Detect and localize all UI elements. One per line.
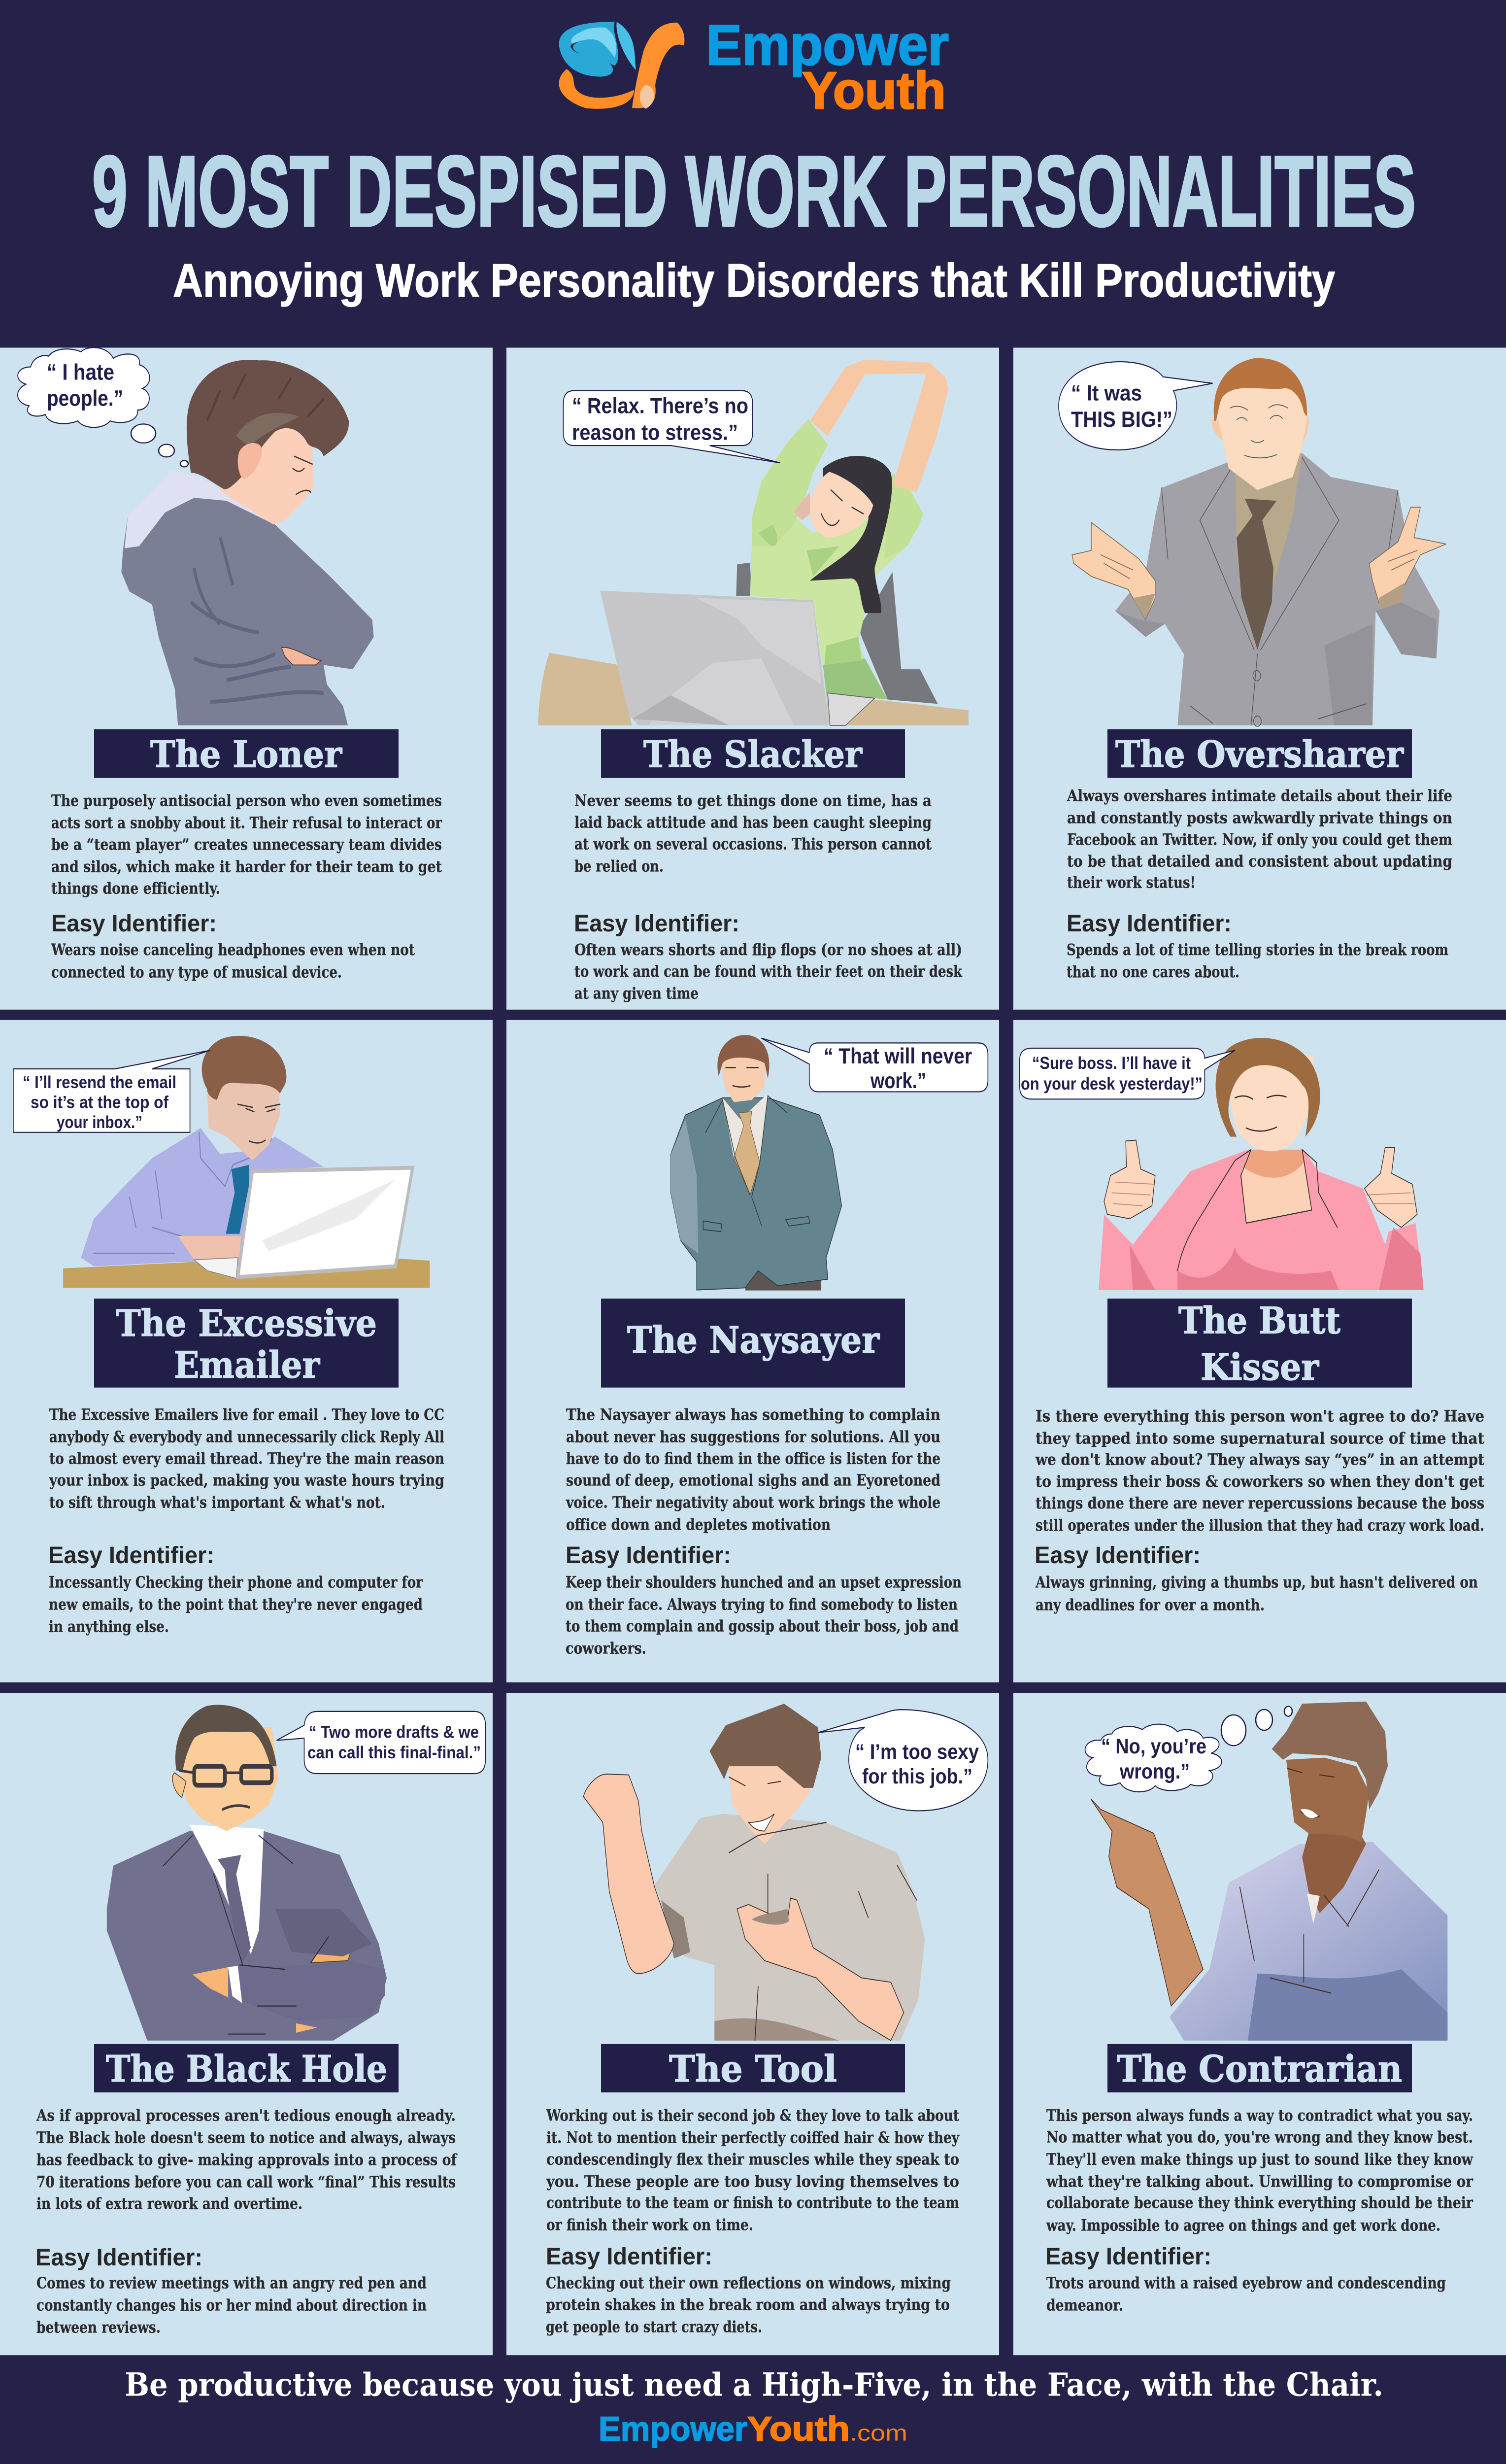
quote text: for this job.”: [862, 1764, 972, 1788]
speech bubble: [1059, 362, 1213, 450]
quote text: your inbox.”: [57, 1112, 142, 1131]
easy identifier heading: Easy Identifier:: [566, 1541, 731, 1569]
description: Working out is their second job & they love to talk about: [546, 2106, 959, 2124]
heading: The Loner: [150, 733, 342, 776]
identifier text: Keep their shoulders hunched and an upset expression: [566, 1573, 962, 1591]
speech bubble: [563, 391, 780, 463]
heading: [1107, 1299, 1412, 1389]
logo text: Empower: Empower: [706, 13, 949, 77]
quote text: reason to stress.”: [572, 419, 738, 445]
quote text: “Sure boss. I’ll have it: [1032, 1053, 1191, 1072]
identifier text: at any given time: [574, 984, 699, 1002]
quote text: “ Two more drafts & we: [309, 1722, 479, 1742]
description: and silos, which make it harder for their team to get: [51, 857, 442, 876]
description: at work on several occasions. This person cannot: [574, 834, 932, 853]
thought bubble: [18, 347, 188, 467]
identifier text: connected to any type of musical device.: [51, 962, 342, 981]
illustration: black hole in suit with glasses: [107, 1705, 387, 2041]
heading: Kisser: [1201, 1346, 1319, 1389]
logo text: Youth: Youth: [802, 62, 946, 120]
identifier text: to work and can be found with their feet on their desk: [574, 961, 963, 981]
illustration: oversharer in gray suit: [1072, 358, 1446, 726]
identifier text: on their face. Always trying to find somebody to listen: [566, 1595, 958, 1613]
identifier text: get people to start crazy diets.: [546, 2317, 762, 2336]
quote text: THIS BIG!”: [1071, 407, 1172, 431]
description: you. These people are too busy loving themselves to: [546, 2172, 959, 2190]
description: to sift through what's important & what's not.: [49, 1493, 385, 1511]
description: acts sort a snobby about it. Their refusal to interact or: [51, 813, 442, 832]
thought bubble: [1085, 1707, 1292, 1792]
description: contribute to the team or finish to contribute to the team: [546, 2193, 959, 2212]
description: be relied on.: [574, 856, 664, 875]
heading: [94, 729, 399, 778]
easy identifier heading: Easy Identifier:: [546, 2243, 712, 2270]
panel: The Loner: [0, 347, 493, 1010]
description: has feedback to give- making approvals into a process of: [36, 2150, 458, 2169]
quote text: work.”: [870, 1068, 926, 1093]
speech bubble: [277, 1711, 485, 1774]
quote text: wrong.”: [1119, 1759, 1190, 1783]
identifier text: coworkers.: [566, 1639, 646, 1657]
illustration: slacker stretching at laptop: [538, 360, 969, 725]
illustration: naysayer in blazer: [671, 1035, 841, 1291]
identifier text: Wears noise canceling headphones even when not: [51, 940, 415, 959]
icon: logo swoosh: [559, 22, 684, 109]
heading: The Oversharer: [1115, 733, 1404, 776]
identifier text: any deadlines for over a month.: [1036, 1595, 1265, 1614]
description: or finish their work on time.: [546, 2215, 753, 2234]
description: condescendingly flex their muscles while they speak to: [546, 2150, 959, 2168]
heading: The Butt: [1178, 1300, 1340, 1342]
identifier text: Incessantly Checking their phone and computer for: [49, 1573, 423, 1591]
illustration: emailer at laptop: [63, 1036, 430, 1288]
quote text: can call this final-final.”: [307, 1743, 481, 1762]
panel: The Tool: [506, 1693, 999, 2355]
description: it. Not to mention their perfectly coiffed hair & how they: [546, 2128, 960, 2147]
speech bubble: [13, 1050, 210, 1132]
description: sound of deep, emotional sighs and an Eyoretoned: [566, 1471, 940, 1489]
illustration: contrarian pointing: [1091, 1702, 1447, 2041]
logo: Empower Youth: [559, 13, 949, 120]
identifier text: to them complain and gossip about their boss, job and: [566, 1616, 959, 1635]
quote text: “ That will never: [824, 1043, 972, 1068]
identifier text: constantly changes his or her mind about direction in: [36, 2295, 427, 2314]
description: office down and depletes motivation: [566, 1515, 831, 1534]
easy identifier heading: Easy Identifier:: [574, 910, 739, 937]
identifier text: Often wears shorts and flip flops (or no shoes at all): [574, 940, 962, 959]
easy identifier heading: Easy Identifier:: [48, 1541, 214, 1569]
panel: The Butt Kisser: [1013, 1020, 1506, 1682]
description: As if approval processes aren't tedious enough already.: [36, 2106, 456, 2124]
description: be a “team player” creates unnecessary team divides: [51, 835, 442, 854]
heading: The Excessive: [116, 1302, 377, 1345]
heading: The Slacker: [643, 733, 863, 776]
quote text: “ I’m too sexy: [855, 1740, 979, 1763]
easy identifier heading: Easy Identifier:: [1045, 2243, 1211, 2270]
speech bubble: [1020, 1048, 1235, 1099]
heading: The Contrarian: [1117, 2048, 1402, 2090]
quote text: “ Relax. There’s no: [572, 393, 748, 418]
heading: The Black Hole: [106, 2048, 387, 2090]
easy identifier heading: Easy Identifier:: [51, 910, 217, 937]
panel: The Naysayer: [506, 1020, 999, 1682]
heading: The Naysayer: [627, 1319, 880, 1362]
illustration: loner in hoodie: [121, 360, 374, 725]
panel: The Slacker: [506, 348, 999, 1010]
footer website logo: [599, 2410, 907, 2448]
panel: The Excessive Emailer: [0, 1020, 493, 1682]
quote text: people.”: [47, 386, 123, 411]
description: The purposely antisocial person who even sometimes: [51, 791, 442, 810]
description: voice. Their negativity about work brings the whole: [566, 1493, 940, 1511]
illustration: butt kisser thumbs up: [1099, 1038, 1424, 1290]
identifier text: in anything else.: [49, 1617, 169, 1636]
description: in lots of extra rework and overtime.: [36, 2194, 302, 2213]
identifier text: that no one cares about.: [1067, 962, 1239, 981]
identifier text: protein shakes in the break room and always trying to: [546, 2295, 950, 2314]
identifier text: Comes to review meetings with an angry red pen and: [36, 2273, 427, 2292]
quote text: on your desk yesterday!”: [1021, 1074, 1203, 1094]
easy identifier heading: Easy Identifier:: [1035, 1541, 1201, 1569]
panel: The Contrarian: [1013, 1693, 1506, 2355]
description: to almost every email thread. They're the main reason: [49, 1449, 444, 1468]
description: anybody & everybody and unnecessarily click Reply All: [49, 1427, 444, 1446]
description: Never seems to get things done on time, has a: [574, 791, 932, 810]
speech bubble: [762, 1038, 988, 1093]
identifier text: new emails, to the point that they're never engaged: [49, 1595, 423, 1613]
description: The Naysayer always has something to complain: [566, 1405, 940, 1424]
footer website logo: Youth: [747, 2410, 850, 2448]
panel: The Oversharer: [1013, 348, 1506, 1010]
identifier text: Checking out their own reflections on windows, mixing: [546, 2273, 951, 2292]
easy identifier heading: Easy Identifier:: [35, 2244, 202, 2270]
quote text: “ I’ll resend the email: [23, 1073, 176, 1092]
description: laid back attitude and has been caught sleeping: [574, 813, 932, 831]
heading: [94, 1299, 399, 1388]
quote text: “ I hate: [47, 360, 114, 385]
heading: The Tool: [669, 2048, 837, 2090]
footer website logo: Empower: [599, 2410, 747, 2448]
quote text: so it’s at the top of: [31, 1093, 169, 1112]
illustration: the tool flexing: [583, 1704, 925, 2041]
description: their work status!: [1067, 873, 1196, 891]
quote text: “ It was: [1071, 380, 1142, 405]
identifier text: between reviews.: [36, 2318, 161, 2336]
easy identifier heading: Easy Identifier:: [1067, 910, 1232, 937]
panel: The Black Hole: [0, 1693, 493, 2355]
description: 70 iterations before you can call work “final” This results: [36, 2172, 456, 2191]
heading: [601, 2044, 905, 2092]
speech bubble: [818, 1710, 988, 1811]
description: The Black hole doesn't seem to notice and always, always: [36, 2128, 456, 2147]
quote text: “ No, you’re: [1101, 1734, 1206, 1758]
description: things done efficiently.: [51, 879, 220, 897]
footer website logo: .com: [850, 2421, 907, 2446]
description: about never has suggestions for solutions. All you: [566, 1427, 940, 1446]
heading: [601, 1299, 905, 1388]
description: your inbox is packed, making you waste hours trying: [49, 1471, 444, 1489]
description: The Excessive Emailers live for email . They love to CC: [49, 1405, 444, 1424]
identifier text: demeanor.: [1046, 2295, 1123, 2314]
description: have to do to find them in the office is listen for the: [566, 1449, 940, 1468]
heading: Emailer: [174, 1344, 320, 1387]
